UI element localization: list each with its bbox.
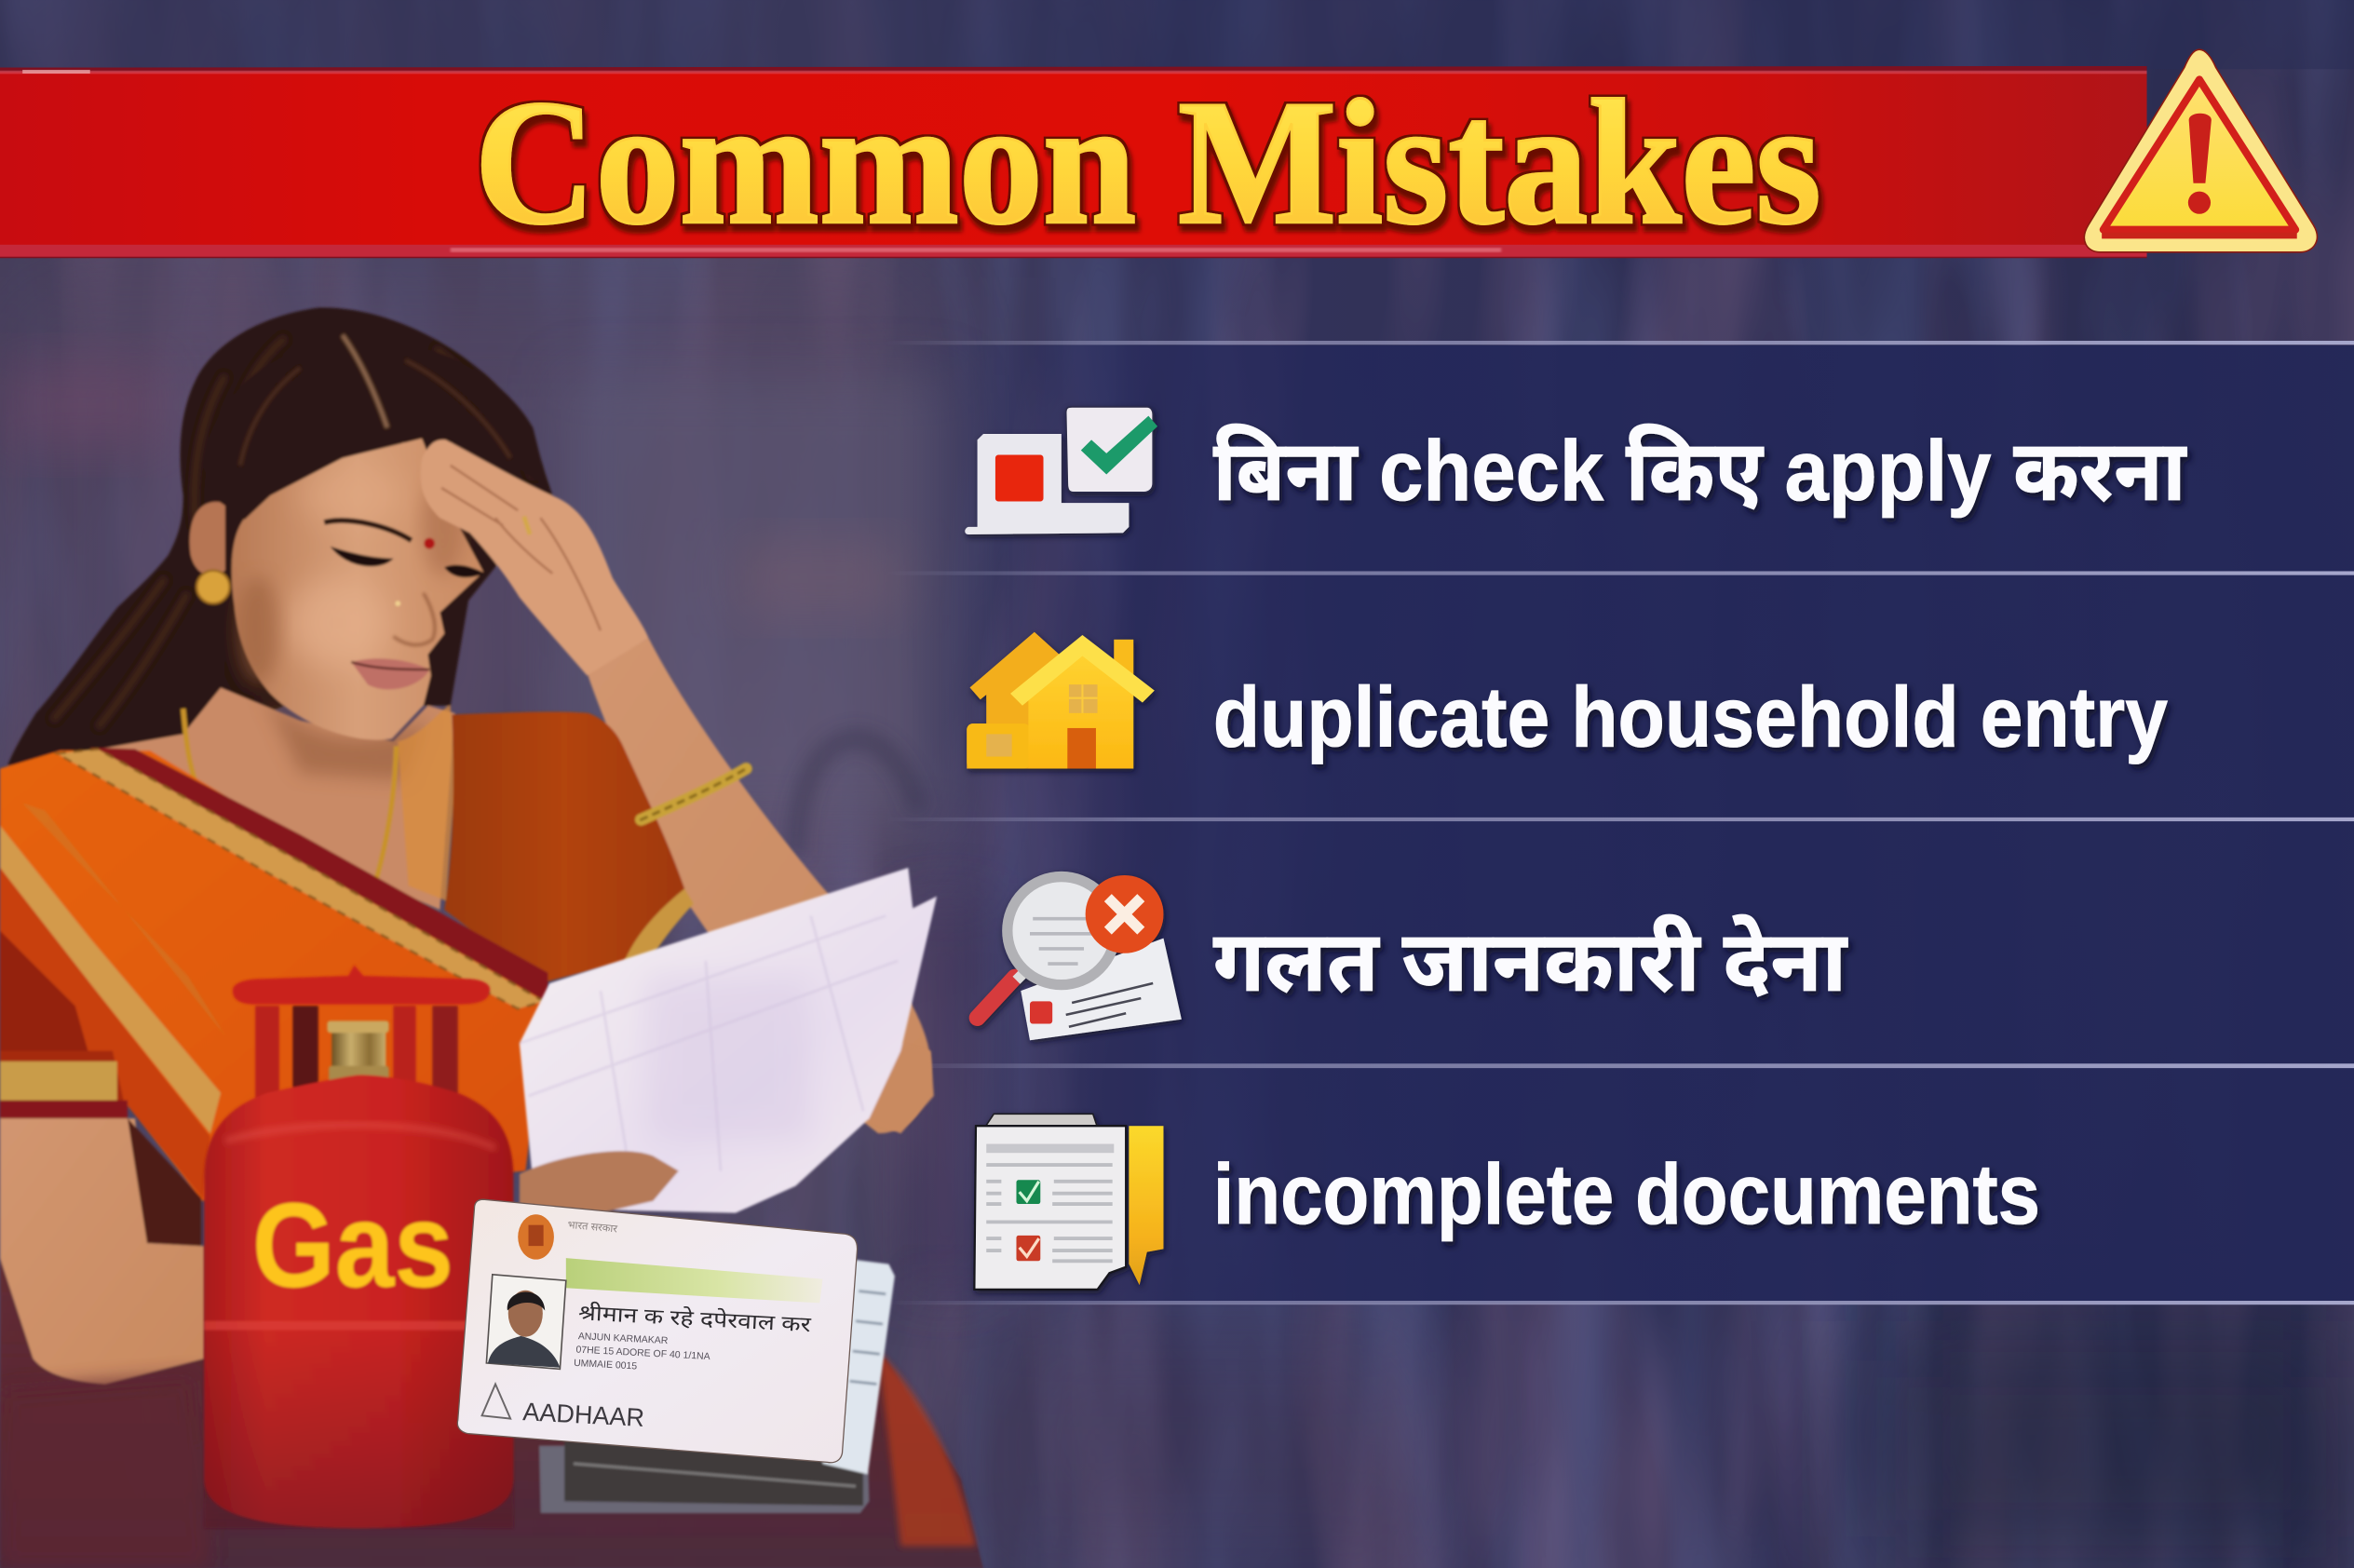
aadhaar logo — [482, 1384, 510, 1419]
collar ring — [233, 966, 490, 1005]
bangle — [641, 768, 746, 819]
panel: list background — [900, 345, 2354, 1303]
icon: houses — [967, 632, 1155, 768]
text: row 1: बिना check किए apply करना — [1213, 424, 2187, 519]
list row 4 — [974, 1114, 2040, 1290]
gas cylinder — [204, 966, 513, 1528]
card detail text: 07HE 15 ADORE OF 40 1/1NA — [575, 1345, 710, 1362]
neck shadow — [255, 676, 427, 780]
divider lines — [886, 341, 2354, 1304]
icon: checklist documents — [974, 1114, 1163, 1290]
AADHAAR wordmark: AADHAAR — [522, 1397, 645, 1432]
nose stud — [395, 601, 400, 606]
hair back — [7, 307, 552, 765]
blouse — [444, 711, 684, 983]
text: row 2: duplicate household entry — [1213, 669, 2168, 764]
back card — [823, 1258, 895, 1474]
photo — [486, 1275, 566, 1369]
earring — [196, 571, 230, 603]
emblem — [518, 1214, 554, 1260]
saree — [0, 750, 548, 1201]
name text: श्रीमान क रहे दपेरवाल कर — [577, 1300, 812, 1336]
book — [539, 1446, 869, 1513]
hand — [421, 439, 648, 676]
left arm — [0, 1118, 204, 1384]
eyebrows — [324, 520, 412, 540]
face — [232, 439, 483, 740]
list row 2 — [967, 632, 2168, 768]
card detail text: UMMAIE 0015 — [574, 1358, 638, 1372]
valve — [327, 1021, 389, 1081]
Aadhaar card — [457, 1199, 858, 1463]
necklace — [183, 709, 397, 883]
saree gold border — [57, 750, 544, 1008]
papers in hand — [520, 868, 937, 1213]
left eye — [331, 547, 393, 566]
arm raised — [587, 638, 931, 1133]
ear — [190, 502, 225, 576]
left sleeve — [0, 1051, 128, 1118]
neck and chest — [90, 687, 455, 910]
icon: laptop and checkbox — [965, 407, 1157, 534]
heading: Common Mistakes: Common Mistakes — [474, 64, 1821, 262]
list row 1 — [965, 407, 2187, 534]
bindi — [424, 538, 435, 548]
hand under papers — [520, 1151, 679, 1213]
lips — [351, 658, 429, 689]
illustration: worried woman — [0, 307, 983, 1568]
list row 3 — [978, 875, 1848, 1040]
documents stack — [539, 1258, 895, 1513]
hair part — [343, 335, 387, 427]
hair over forehead — [203, 338, 548, 520]
icon: magnifier and document error — [978, 875, 1182, 1040]
text: row 4: incomplete documents — [1213, 1147, 2040, 1242]
text: row 3: गलत जानकारी देना — [1213, 914, 1848, 1009]
green band — [566, 1258, 823, 1303]
title banner — [0, 66, 2147, 258]
lower body — [0, 1246, 983, 1568]
cylinder body — [204, 1075, 513, 1528]
card heading text: भारत सरकार — [567, 1220, 618, 1235]
face shading — [237, 468, 464, 684]
nose — [393, 593, 435, 645]
ring — [524, 517, 530, 534]
icon: warning triangle — [2084, 49, 2317, 252]
card detail text: ANJUN KARMAKAR — [578, 1331, 669, 1346]
label: Gas: Gas — [252, 1179, 453, 1313]
right eye — [444, 565, 485, 577]
